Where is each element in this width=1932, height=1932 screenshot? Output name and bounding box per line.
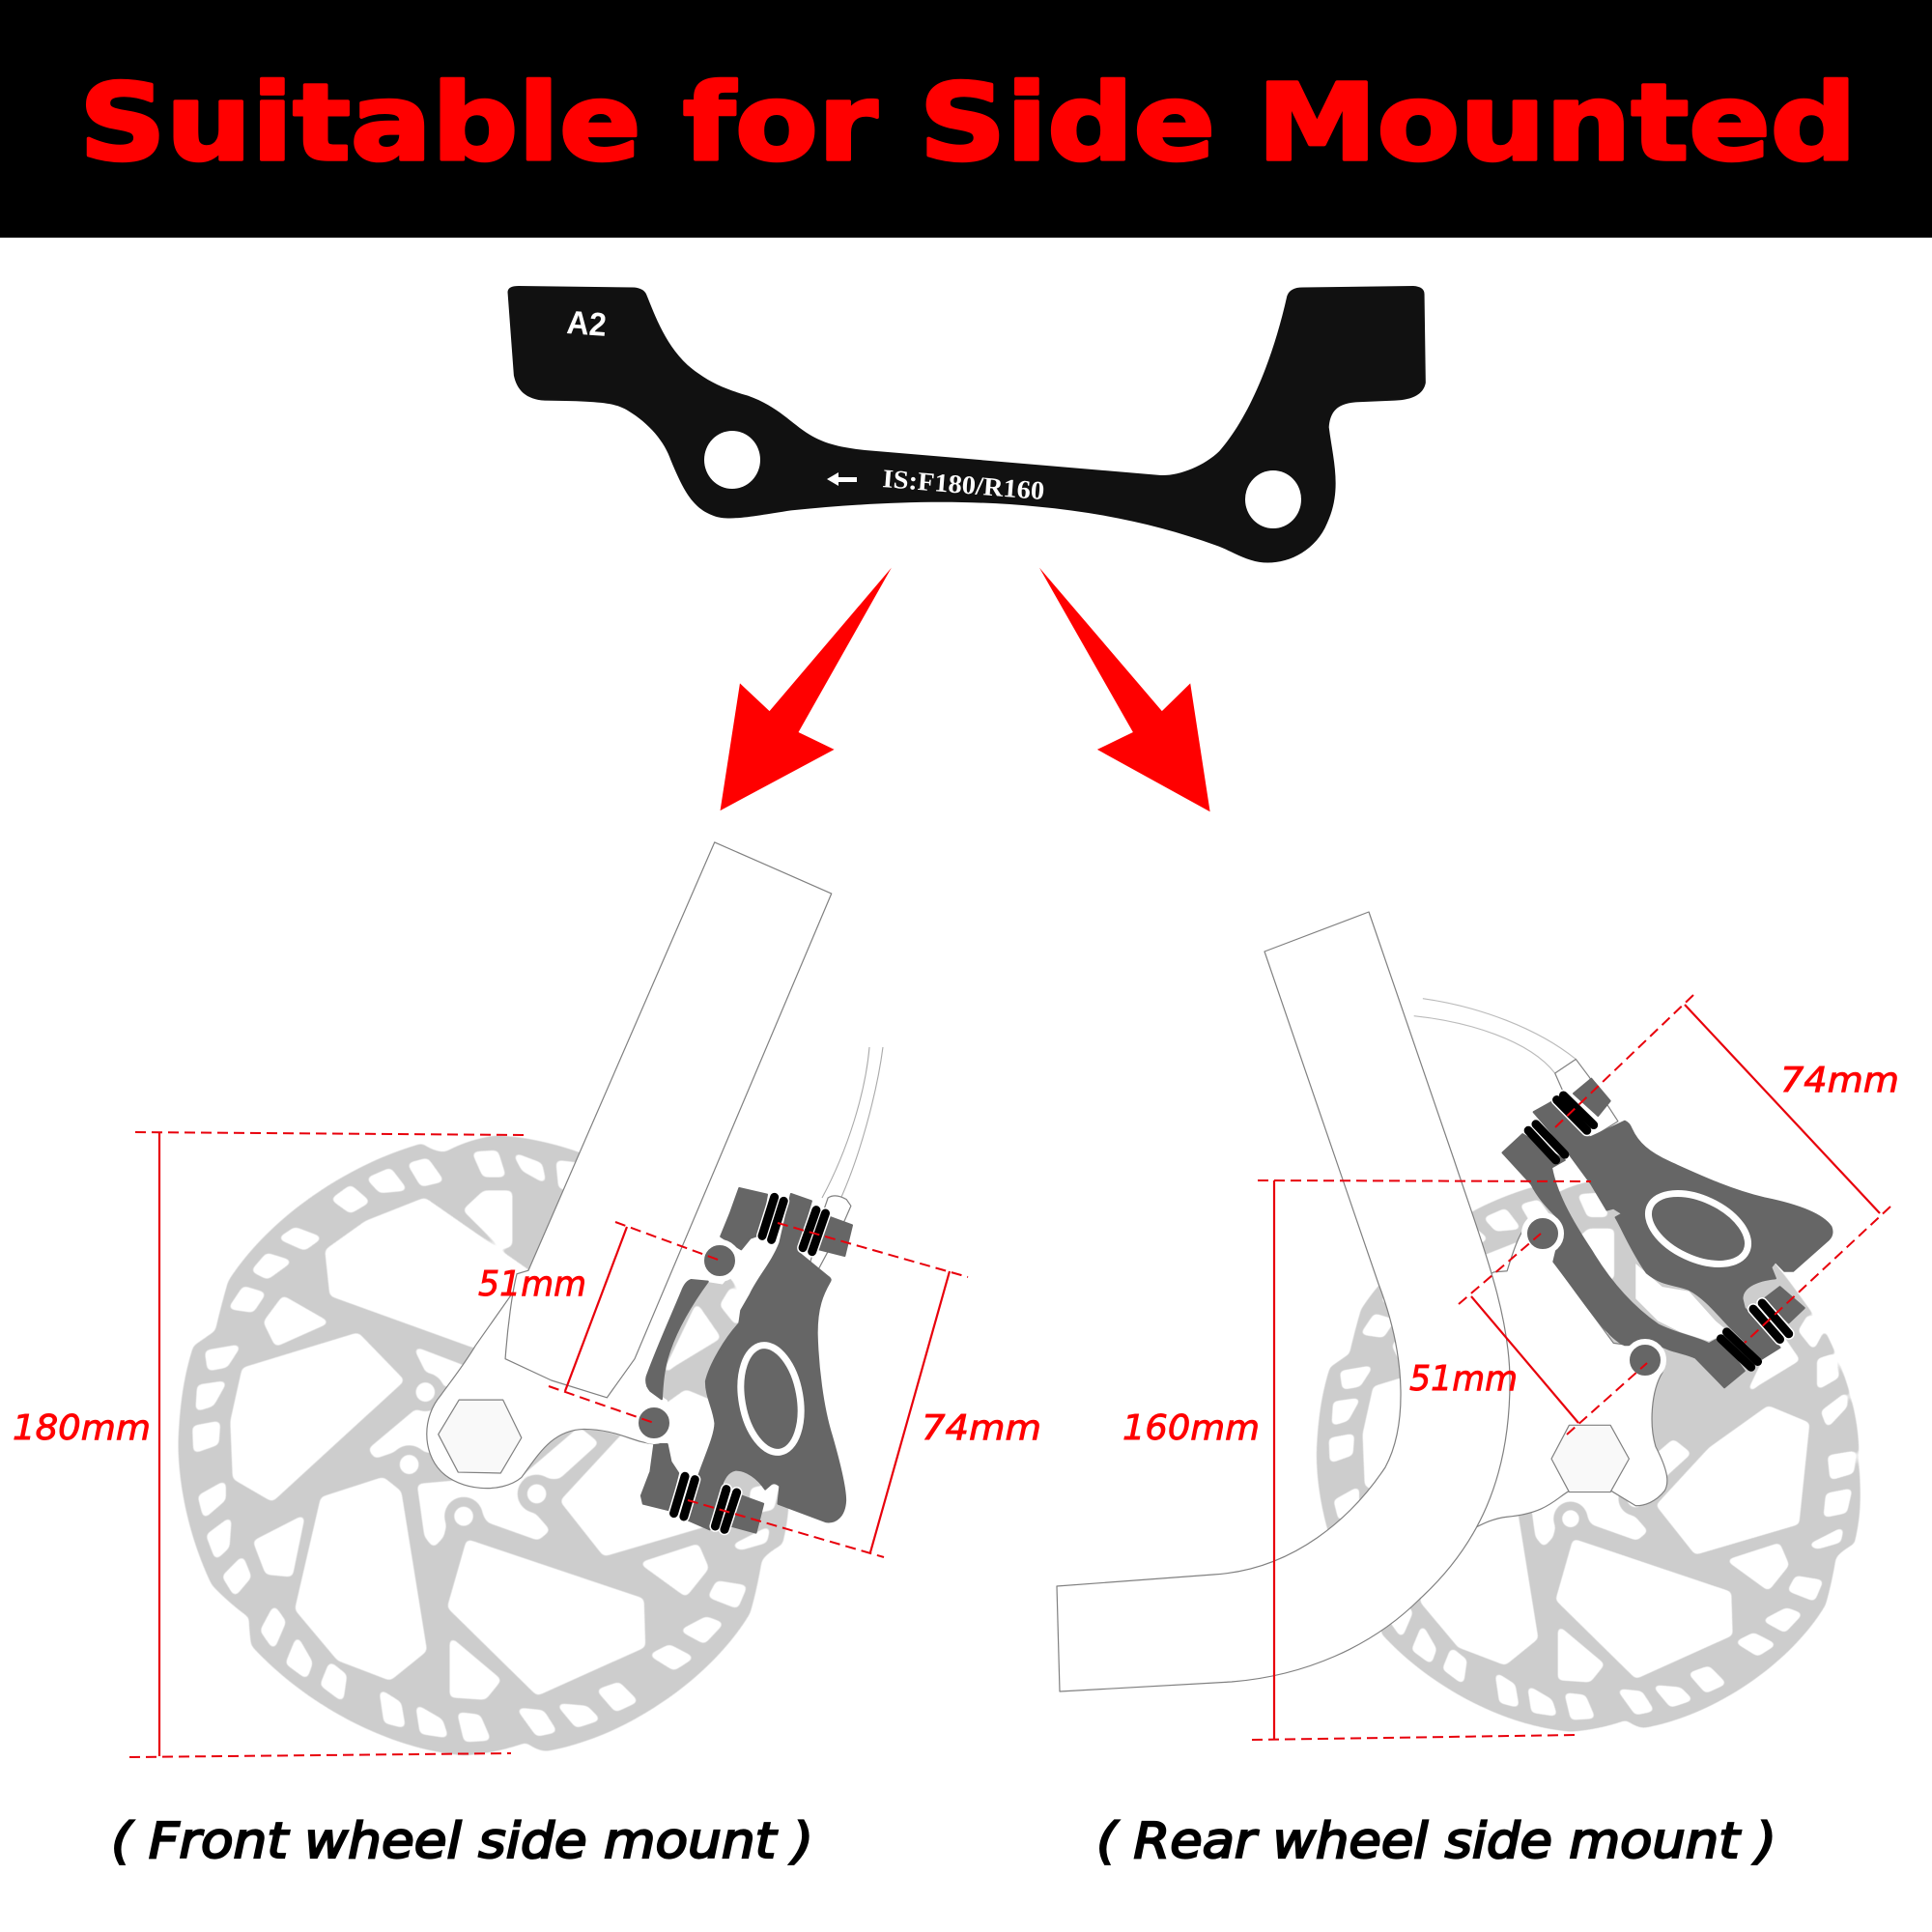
front fork dropout and adapter [427,1224,743,1489]
front fork leg [505,842,832,1398]
front hose fitting [810,1196,851,1268]
rear hex hub [1551,1425,1629,1492]
caption: rear wheel: ( Rear wheel side mount ) [1096,1813,1776,1870]
label 51mm rear: 51mm [1409,1359,1518,1399]
front mount bolts [636,1242,738,1441]
label 51mm: 51mm [478,1264,586,1304]
panel: front wheel side mount diagram [13,842,1041,1767]
panel: rear wheel side mount diagram [1057,912,1899,1742]
bracket label IS:F180/R160: IS:F180/R160 [882,464,1045,505]
rear dimension lines [1252,995,1890,1740]
arrow: to rear mount [1039,568,1210,811]
front brake rotor [163,1123,810,1767]
label 160mm: 160mm [1122,1408,1260,1448]
front hex hub [439,1400,522,1473]
front brake hose [822,1047,883,1208]
adapter bracket photo [508,286,1426,563]
rear hose fitting [1555,1059,1618,1138]
label 180mm: 180mm [13,1408,151,1448]
rear dropout plate [1449,1213,1667,1532]
title: Suitable for Side Mounted [79,61,1857,185]
rear chainstay [1057,912,1510,1691]
bracket label A2: A2 [565,304,608,344]
rear brake rotor [1303,1170,1879,1742]
label 74mm rear: 74mm [1780,1061,1899,1100]
rear brake hose [1414,999,1576,1073]
rear mount bolts [1524,1215,1663,1378]
caption: front wheel: ( Front wheel side mount ) [111,1813,813,1870]
front caliper [641,1188,852,1533]
label 74mm: 74mm [922,1408,1041,1448]
rear caliper piston ring [1637,1179,1759,1278]
front caliper piston ring [733,1341,809,1457]
arrow: to front mount [721,568,892,810]
bracket arrow mark [827,472,857,486]
front dimension lines [129,1132,968,1757]
title banner [0,0,1932,238]
rear caliper [1503,1079,1833,1387]
